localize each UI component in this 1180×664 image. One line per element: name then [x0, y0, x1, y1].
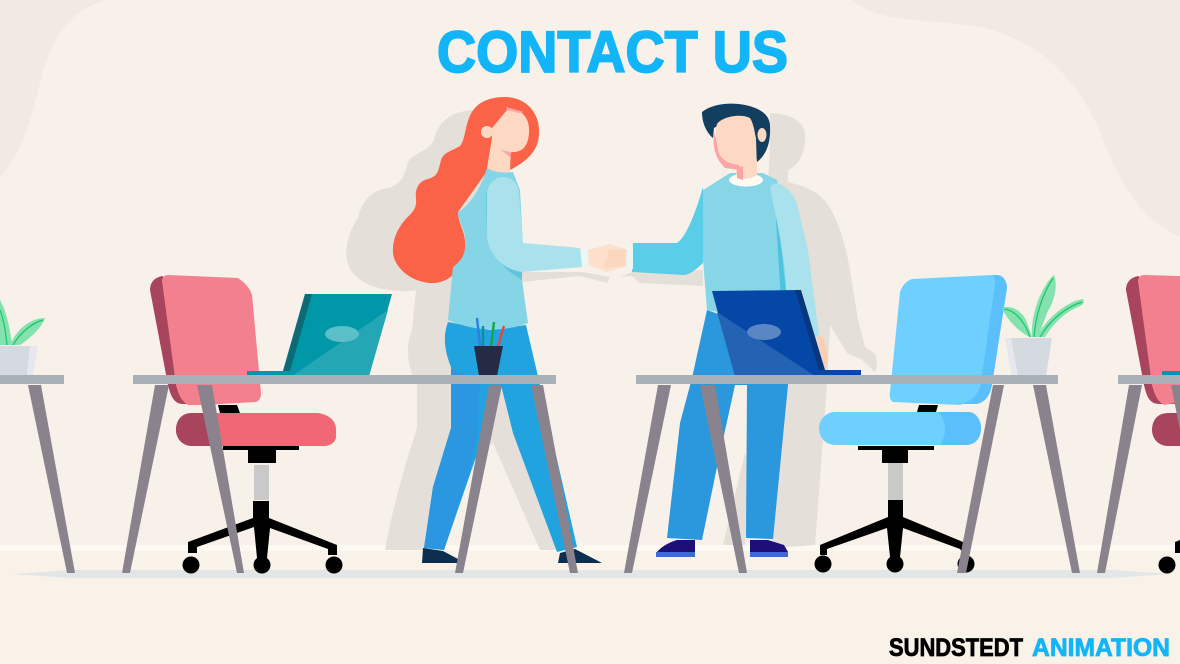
person: man: [632, 104, 828, 557]
shadow: man: [620, 113, 877, 548]
neck: [735, 162, 757, 179]
person: woman: [393, 97, 602, 563]
backrest: [150, 276, 200, 404]
base: [182, 446, 342, 574]
face: [492, 110, 529, 152]
desk: left: [122, 375, 578, 573]
hand on laptop: [817, 336, 828, 372]
plant: left partial: [0, 300, 45, 376]
chair: pink partial right: [1126, 275, 1180, 574]
ear: [481, 126, 493, 138]
logo: ANIMATION: [1032, 634, 1170, 662]
plant: right: [1002, 275, 1084, 376]
chair: blue: [814, 275, 1007, 572]
seat: [176, 413, 336, 446]
collar: [729, 174, 763, 186]
laptop: teal: [247, 294, 392, 376]
trousers: [424, 322, 577, 552]
shadow: woman: [346, 110, 610, 550]
hair: [702, 104, 770, 162]
neck: [487, 138, 511, 172]
laptop: blue: [712, 290, 861, 376]
shoes: [422, 548, 458, 563]
desk: far left: [0, 375, 75, 573]
title: CONTACT US: [437, 20, 788, 85]
seat: [819, 412, 981, 445]
sweater: [448, 168, 528, 329]
connector: [917, 405, 938, 412]
sleeve: [770, 184, 819, 338]
desk: far right: [1097, 375, 1180, 573]
logo: [889, 634, 1170, 662]
trousers: [667, 310, 792, 540]
desk: right: [624, 375, 1080, 573]
chair: pink: [150, 275, 342, 574]
base: [814, 446, 974, 572]
sleeve: [487, 177, 582, 272]
ear: [757, 145, 766, 162]
logo: SUNDSTEDT: [889, 634, 1023, 662]
shoes: [657, 540, 695, 552]
sweater: [703, 173, 802, 340]
hair back: [393, 97, 539, 283]
arm: [632, 187, 703, 275]
handshake: [588, 244, 633, 272]
connector: [218, 405, 240, 413]
pen cup: [474, 318, 504, 376]
backrest: [960, 275, 1007, 404]
face shadow: [714, 133, 740, 170]
face: [716, 116, 757, 170]
